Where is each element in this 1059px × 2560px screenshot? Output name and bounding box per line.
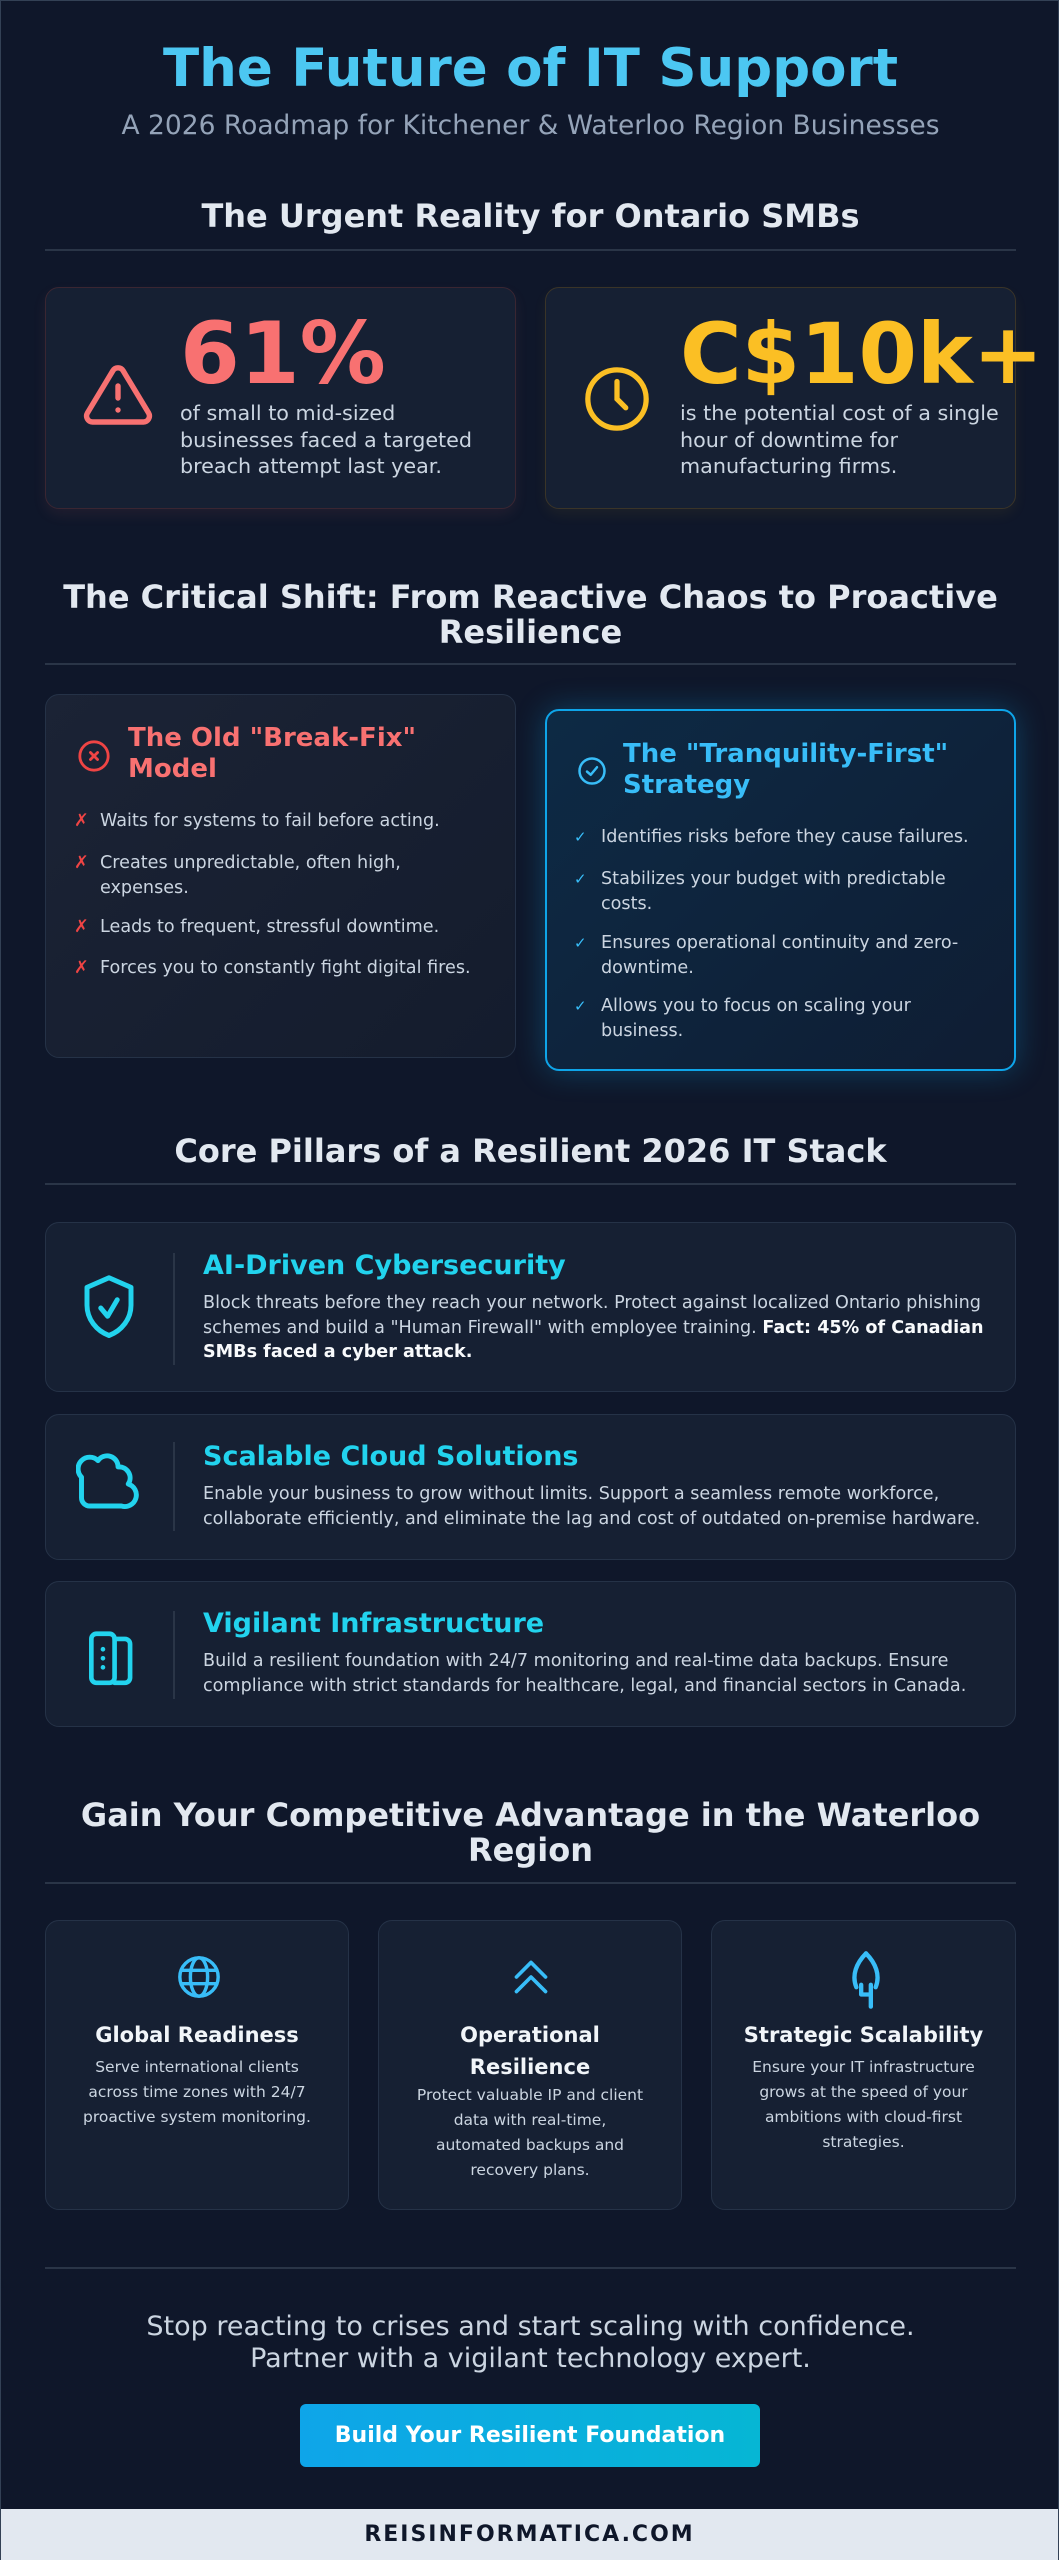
list: Leads to frequent, stressful downtime. xyxy=(100,917,439,937)
stat number: C$10k+ xyxy=(680,305,1043,403)
heading: competitive advantage: Region xyxy=(468,1831,593,1869)
list: business. xyxy=(601,1021,683,1041)
footer: REISINFORMATICA.COM xyxy=(364,2522,695,2547)
pillar title: Vigilant Infrastructure xyxy=(203,1608,544,1639)
card text: Protect valuable IP and client xyxy=(417,2086,643,2104)
pillar text: Build a resilient foundation with 24/7 monitoring and real-time data backups. Ensure compliance with strict standards for healthcare, legal, and financial sectors in Canada. xyxy=(203,1651,966,1696)
icon: server devices xyxy=(89,1631,132,1686)
closing statement xyxy=(146,2311,915,2374)
heading: critical shift: Resilience xyxy=(439,613,622,651)
card title: The Old "Break-Fix" xyxy=(128,723,416,753)
list: Allows you to focus on scaling your xyxy=(601,996,911,1016)
card text: ambitions with cloud-first xyxy=(765,2108,962,2126)
list: ✓ xyxy=(574,934,587,952)
closing statement: Stop reacting to crises and start scaling with confidence. xyxy=(146,2311,915,2342)
card text: strategies. xyxy=(822,2133,905,2151)
card title xyxy=(460,2023,600,2079)
heading: critical shift: The Critical Shift: From Reactive Chaos to Proactive xyxy=(63,578,998,616)
list xyxy=(574,827,969,1041)
list: ✗ xyxy=(74,917,89,937)
list: Creates unpredictable, often high, xyxy=(100,853,401,873)
panel: vigilant infrastructure xyxy=(45,1581,1016,1727)
heading: core pillars: Core Pillars of a Resilient 2026 IT Stack xyxy=(174,1132,887,1170)
CTA button: Build Your Resilient Foundation xyxy=(335,2423,725,2448)
card text xyxy=(417,2086,643,2179)
pillar title: AI-Driven Cybersecurity xyxy=(203,1250,566,1281)
list: ✓ xyxy=(574,997,587,1015)
panel: old break-fix xyxy=(45,694,516,1058)
icon: double chevron up xyxy=(514,1960,548,1994)
list: ✗ xyxy=(74,811,89,831)
card text xyxy=(752,2058,975,2151)
subtitle: A 2026 Roadmap for Kitchener & Waterloo Region Businesses xyxy=(121,110,940,141)
stat text: is the potential cost of a single xyxy=(680,401,999,425)
icon: shield check xyxy=(84,1275,134,1338)
list: ✗ xyxy=(74,958,89,978)
list: Identifies risks before they cause failures. xyxy=(601,827,969,847)
panel: AI-driven cybersecurity xyxy=(45,1222,1016,1392)
card text: Ensure your IT infrastructure xyxy=(752,2058,975,2076)
card text: Serve international clients xyxy=(95,2058,299,2076)
card title: Strategy xyxy=(623,770,750,800)
card title: The "Tranquility-First" xyxy=(623,739,948,769)
stat text: breach attempt last year. xyxy=(180,454,442,478)
pillar text: Block threats before they reach your network. Protect against localized Ontario phishing schemes and build a "Human Firewall" with employee training. Fact: 45% of Canadian SMBs faced a cyber attack. xyxy=(203,1293,984,1362)
card text: across time zones with 24/7 xyxy=(88,2083,306,2101)
list: Forces you to constantly fight digital fires. xyxy=(100,958,471,978)
card title xyxy=(128,723,416,784)
list: Stabilizes your budget with predictable xyxy=(601,869,946,889)
closing statement: Partner with a vigilant technology expert. xyxy=(250,2343,811,2374)
pillar title: Scalable Cloud Solutions xyxy=(203,1441,578,1472)
icon: globe xyxy=(178,1956,220,1998)
list: costs. xyxy=(601,894,652,914)
card title: Model xyxy=(128,754,217,784)
icon: check circle xyxy=(578,757,606,785)
card text: grows at the speed of your xyxy=(759,2083,968,2101)
stat number: 61% xyxy=(180,304,386,404)
stat text xyxy=(680,401,999,478)
panel: tranquility-first xyxy=(545,709,1016,1071)
list xyxy=(74,811,471,978)
icon: cloud xyxy=(76,1453,139,1509)
list: ✓ xyxy=(574,870,587,888)
card text: proactive system monitoring. xyxy=(83,2108,311,2126)
heading: urgent reality: The Urgent Reality for Ontario SMBs xyxy=(201,197,860,235)
list: Waits for systems to fail before acting. xyxy=(100,811,440,831)
heading: critical shift xyxy=(63,578,998,651)
list: downtime. xyxy=(601,958,694,978)
card title: Resilience xyxy=(470,2055,590,2079)
heading: competitive advantage xyxy=(81,1796,980,1869)
panel: strategic scalability xyxy=(711,1920,1016,2210)
icon: x circle xyxy=(78,740,110,772)
card text: automated backups and xyxy=(436,2136,624,2154)
icon: warning triangle xyxy=(84,365,152,425)
stat text xyxy=(180,401,472,478)
icon: rocket xyxy=(852,1951,880,2009)
card title xyxy=(623,739,948,800)
card text: data with real-time, xyxy=(454,2111,606,2129)
CTA button xyxy=(300,2404,760,2467)
card text xyxy=(83,2058,311,2126)
card title: Global Readiness xyxy=(95,2023,299,2047)
panel: global readiness xyxy=(45,1920,349,2210)
icon: clock xyxy=(585,367,649,431)
card title: Operational xyxy=(460,2023,600,2047)
footer xyxy=(1,2509,1058,2560)
list: ✗ xyxy=(74,853,89,873)
card title: Strategic Scalability xyxy=(744,2023,983,2047)
pillar text: Enable your business to grow without limits. Support a seamless remote workforce, collaborate efficiently, and eliminate the lag and cost of outdated on-premise hardware. xyxy=(203,1484,980,1528)
heading: competitive advantage: Gain Your Competitive Advantage in the Waterloo xyxy=(81,1796,980,1834)
title: The Future of IT Support xyxy=(163,38,898,99)
stat text: of small to mid-sized xyxy=(180,401,395,425)
list: ✓ xyxy=(574,828,587,846)
stat text: manufacturing firms. xyxy=(680,454,897,478)
card text: recovery plans. xyxy=(470,2161,590,2179)
panel: stat 61% xyxy=(45,287,516,509)
stat text: hour of downtime for xyxy=(680,428,898,452)
list: expenses. xyxy=(100,878,189,898)
list: Ensures operational continuity and zero- xyxy=(601,933,958,953)
panel: scalable cloud xyxy=(45,1414,1016,1560)
stat text: businesses faced a targeted xyxy=(180,428,472,452)
panel: operational resilience xyxy=(378,1920,682,2210)
panel: stat C$10k+ xyxy=(545,287,1016,509)
